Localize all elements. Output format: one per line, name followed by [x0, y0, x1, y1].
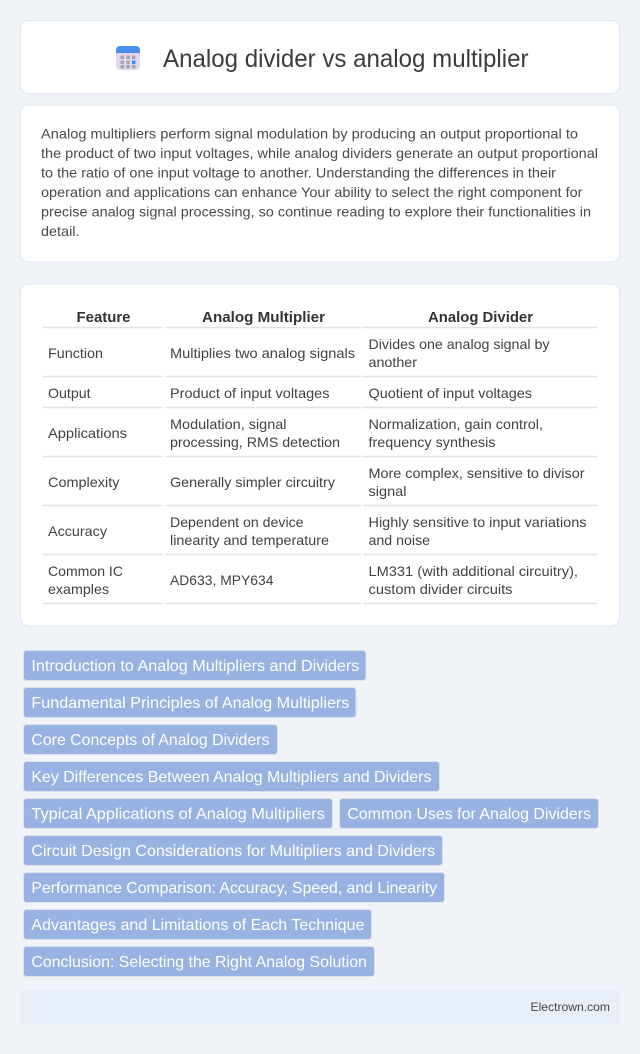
title: Analog divider vs analog multiplier	[163, 45, 528, 73]
table row: common IC examples: LM331 (with additional circuitry),	[368, 563, 578, 579]
tag: circuit design	[24, 836, 442, 866]
table row: accuracy: Accuracy	[48, 523, 107, 539]
table header row: Feature	[76, 309, 130, 326]
table row: function: Function	[48, 345, 103, 361]
table row: applications: frequency synthesis	[368, 434, 496, 450]
tag: typical applications: Typical Applications of Analog Multipliers	[31, 806, 325, 823]
text block: introduction paragraph: the product of two input voltages, while analog dividers generate an output proportional	[41, 145, 598, 161]
tag: key differences	[24, 762, 440, 792]
tag: core concepts	[24, 724, 278, 754]
tag: key differences: Key Differences Between Analog Multipliers and Dividers	[31, 769, 431, 786]
table row: output: Output	[48, 385, 91, 401]
tag: common uses	[340, 798, 598, 828]
footer	[20, 990, 620, 1024]
table row: function: another	[368, 354, 417, 370]
tag: advantages and limitations	[24, 910, 372, 940]
tag: introduction	[24, 650, 366, 680]
table row: complexity: signal	[368, 483, 406, 499]
table header row: Analog Multiplier	[202, 309, 325, 326]
table row: complexity	[48, 465, 585, 499]
text block: introduction paragraph: precise analog signal processing, so continue reading to explore their functionalities in	[41, 204, 591, 220]
table row: output: Quotient of input voltages	[368, 385, 532, 401]
footer: Electrown.com	[530, 1000, 610, 1014]
table header row: Analog Divider	[428, 309, 533, 326]
table row: applications: processing, RMS detection	[170, 434, 340, 450]
table row: function: Divides one analog signal by	[368, 336, 550, 352]
text block: introduction paragraph	[41, 126, 598, 239]
table row: applications	[48, 416, 543, 450]
text block: introduction paragraph: operation and applications can enhance Your ability to select the right component for	[41, 184, 583, 200]
text block: introduction paragraph: detail.	[41, 223, 80, 239]
tag: core concepts: Core Concepts of Analog Dividers	[31, 732, 269, 749]
table row: output: Product of input voltages	[170, 385, 330, 401]
text block: introduction paragraph: Analog multipliers perform signal modulation by producing an output proportional to	[41, 126, 578, 142]
table row: common IC examples: custom divider circuits	[368, 581, 512, 597]
icon: calculator grid	[116, 46, 140, 70]
tag: performance comparison: Performance Comparison: Accuracy, Speed, and Linearity	[31, 880, 437, 897]
table row: accuracy: Dependent on device	[170, 514, 304, 530]
table row: accuracy: Highly sensitive to input variations	[368, 514, 586, 530]
table row: common IC examples: Common IC	[48, 563, 123, 579]
tag: performance comparison	[24, 872, 444, 902]
table row: applications: Normalization, gain control,	[368, 416, 543, 432]
tag: circuit design: Circuit Design Considerations for Multipliers and Dividers	[31, 843, 435, 860]
table row: function: Multiplies two analog signals	[170, 345, 355, 361]
table row: complexity: Generally simpler circuitry	[170, 474, 335, 490]
table row: common IC examples: examples	[48, 581, 109, 597]
table header row	[76, 309, 533, 326]
tag: typical applications	[24, 798, 332, 828]
table row: complexity: Complexity	[48, 474, 120, 490]
table row: accuracy: linearity and temperature	[170, 532, 329, 548]
table row: accuracy: and noise	[368, 532, 430, 548]
panel: topic tags	[24, 650, 598, 976]
tag: common uses: Common Uses for Analog Dividers	[347, 806, 591, 823]
panel: introduction	[20, 105, 620, 262]
table row: common IC examples	[48, 563, 578, 597]
table row: accuracy	[48, 514, 586, 548]
text block: introduction paragraph: to the ratio of one input voltage to another. Understanding the differences in their	[41, 164, 556, 180]
table row: output	[48, 385, 532, 401]
panel: title header	[20, 20, 620, 94]
tag: conclusion	[24, 946, 374, 976]
tag: conclusion: Conclusion: Selecting the Right Analog Solution	[31, 954, 367, 971]
panel: comparison table	[20, 284, 620, 626]
table row: applications: Applications	[48, 425, 127, 441]
tag: advantages and limitations: Advantages and Limitations of Each Technique	[31, 917, 365, 934]
tag: introduction: Introduction to Analog Multipliers and Dividers	[31, 658, 359, 675]
table row: function	[48, 336, 550, 370]
tag: fundamental principles: Fundamental Principles of Analog Multipliers	[31, 695, 349, 712]
table row: common IC examples: AD633, MPY634	[170, 572, 274, 588]
table row: complexity: More complex, sensitive to divisor	[368, 465, 585, 481]
table row: applications: Modulation, signal	[170, 416, 286, 432]
tag: fundamental principles	[24, 688, 356, 718]
